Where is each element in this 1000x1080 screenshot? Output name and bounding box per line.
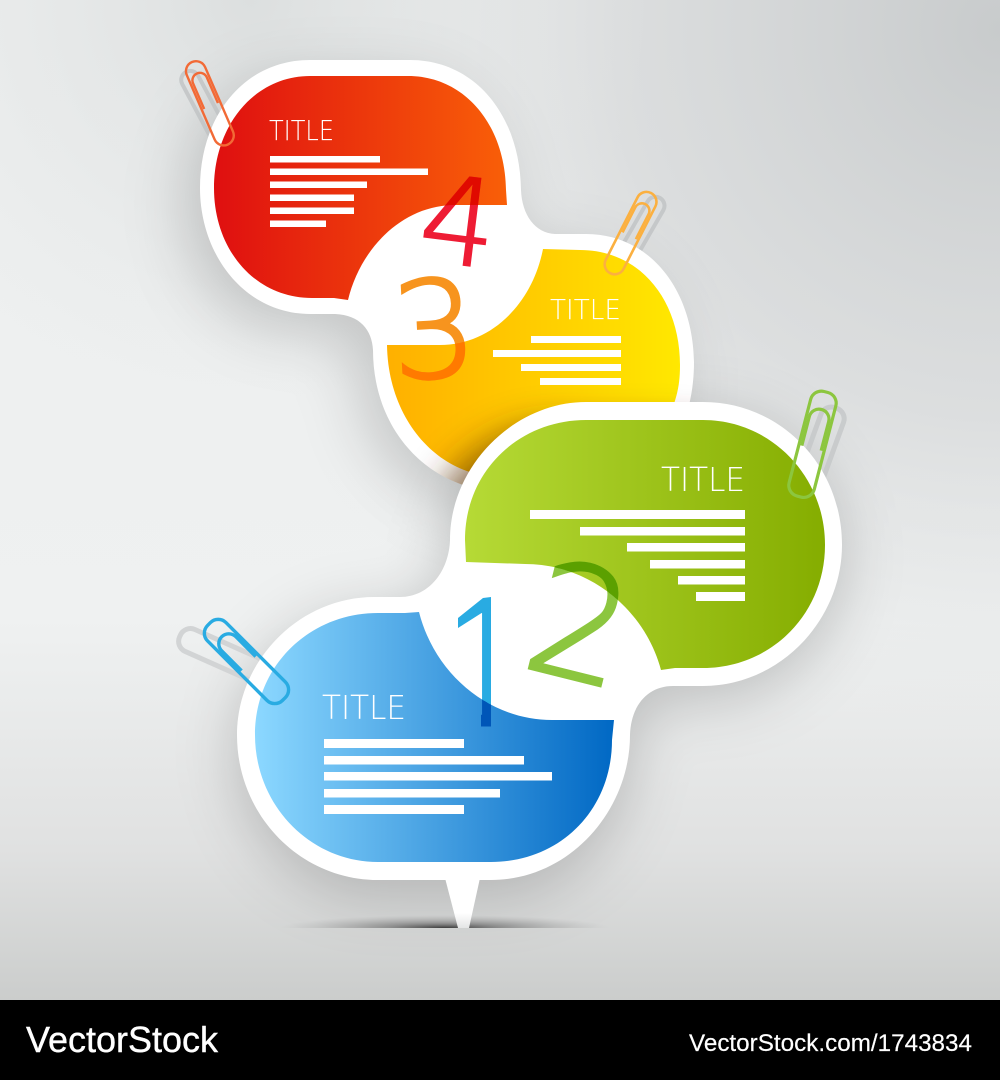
number 1: 1 [433,568,539,764]
panel: step 1 blue bubble [255,612,614,862]
number 1 overlap: 1 [433,568,539,764]
text lines: step 2 [530,510,745,601]
number 4 overlap: 4 [412,150,505,297]
ground shadow under pin [304,917,587,928]
title: step 1: TITLE [322,688,406,727]
text lines: step 3 [493,336,621,385]
paper clip: red [183,58,237,149]
panel: step 2 green bubble [465,420,825,670]
number 4: 4 [412,150,505,297]
paper clip shadow: red [178,68,233,150]
title: step 3: TITLE [550,294,621,326]
text lines: step 1 [324,739,552,814]
title: step 2: TITLE [661,460,745,499]
soft shadow: upper bubbles [184,78,678,538]
footer bar [0,1000,1000,1080]
panel: step 3 yellow bubble [387,249,680,500]
paper clip shadow: orange [610,194,668,275]
number 3: 3 [388,251,481,411]
soft shadow: lower bubbles [237,416,842,894]
paper clip shadow: green [793,404,847,499]
number 2 overlap: 2 [510,526,650,725]
paper clip: orange [601,188,660,278]
number 1 flag [458,597,491,628]
number 2: 2 [510,526,650,725]
number 3 overlap: 3 [388,251,481,411]
footer image id: VectorStock.com/1743834 [689,1030,972,1057]
paper clip: blue [200,615,293,708]
cast shadow on yellow bubble from green paper [426,398,690,485]
paper clip: green [786,389,839,500]
panel: step 4 red bubble [214,76,507,300]
paper clip shadow: blue [175,625,267,684]
white paper: steps 2 and 1 [237,402,842,880]
text lines: step 4 [270,156,428,227]
white paper: steps 4 and 3 [200,60,694,520]
title: step 4: TITLE [269,115,334,147]
footer logo: VectorStock [26,1019,219,1060]
pointer pin [445,878,480,928]
